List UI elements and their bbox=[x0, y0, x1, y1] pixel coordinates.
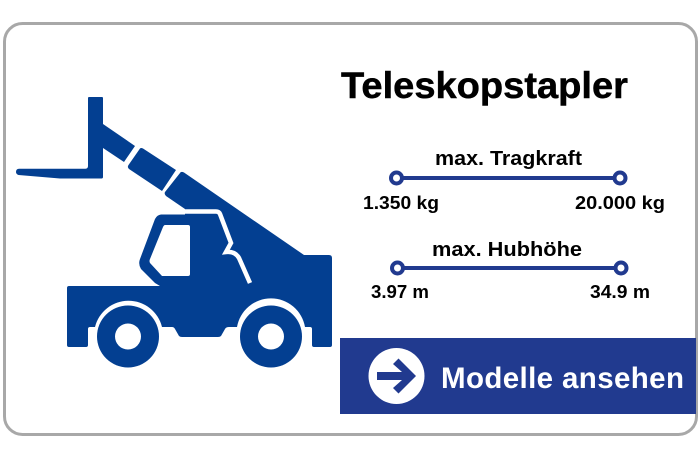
value: 20.000 kg: 20.000 kg bbox=[575, 193, 665, 213]
title: Teleskopstapler bbox=[341, 64, 628, 106]
value: 1.350 kg: 1.350 kg bbox=[363, 193, 439, 213]
range line: Tragkraft bbox=[391, 172, 626, 184]
icon: telescopic handler bbox=[16, 97, 332, 368]
value: 3.97 m: 3.97 m bbox=[371, 282, 429, 302]
icon: arrow in circle bbox=[368, 348, 424, 404]
button label: Modelle ansehen bbox=[441, 362, 684, 395]
button: Modelle ansehen bbox=[340, 338, 696, 414]
heading: max. Hubhöhe: max. Hubhöhe bbox=[432, 239, 582, 261]
heading: max. Tragkraft: max. Tragkraft bbox=[435, 148, 582, 170]
value: 34.9 m: 34.9 m bbox=[590, 282, 650, 302]
range line: Hubhöhe bbox=[392, 262, 626, 274]
